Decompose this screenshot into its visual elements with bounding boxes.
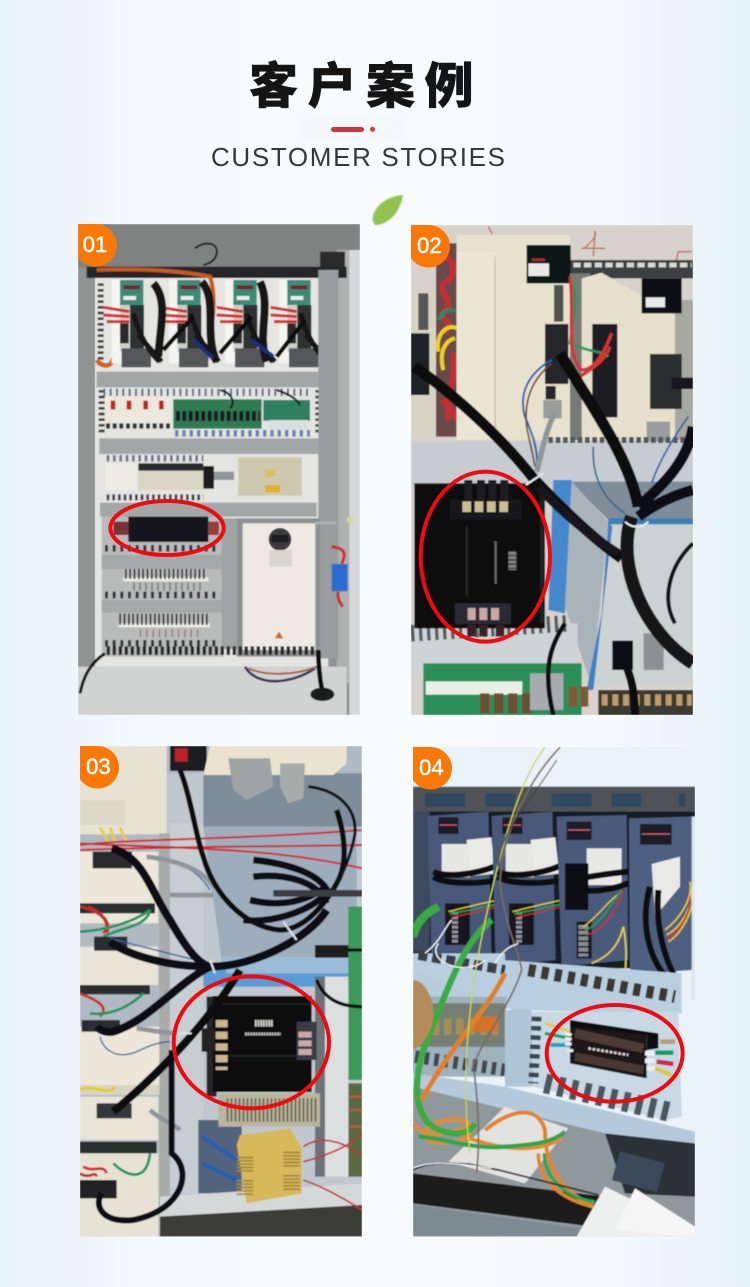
badge: 03: [76, 746, 119, 789]
title: 客户案例: [249, 60, 474, 114]
badge: 04: 04: [419, 755, 444, 780]
callout: red ellipse: [547, 1005, 683, 1102]
divider: red dash and dot: [300, 118, 405, 140]
badge: 02: [407, 225, 450, 268]
badge: 01: [74, 224, 117, 267]
panel: case 01 control cabinet photo: [74, 224, 360, 715]
callout: red ellipse: [110, 501, 224, 555]
panel: case 03 wiring photo: [76, 746, 362, 1237]
callout: red ellipse: [174, 976, 329, 1108]
subtitle: CUSTOMER STORIES: [211, 142, 505, 172]
icon: green leaf: [373, 195, 403, 225]
badge: 02: 02: [417, 233, 442, 258]
badge: 04: [409, 747, 452, 790]
panel: case 04 servo shelf photo: [409, 747, 695, 1237]
badge: 03: 03: [86, 754, 111, 779]
badge: 01: 01: [83, 232, 107, 257]
panel: case 02 servo drive photo: [407, 225, 693, 715]
callout: red ellipse: [421, 472, 550, 642]
